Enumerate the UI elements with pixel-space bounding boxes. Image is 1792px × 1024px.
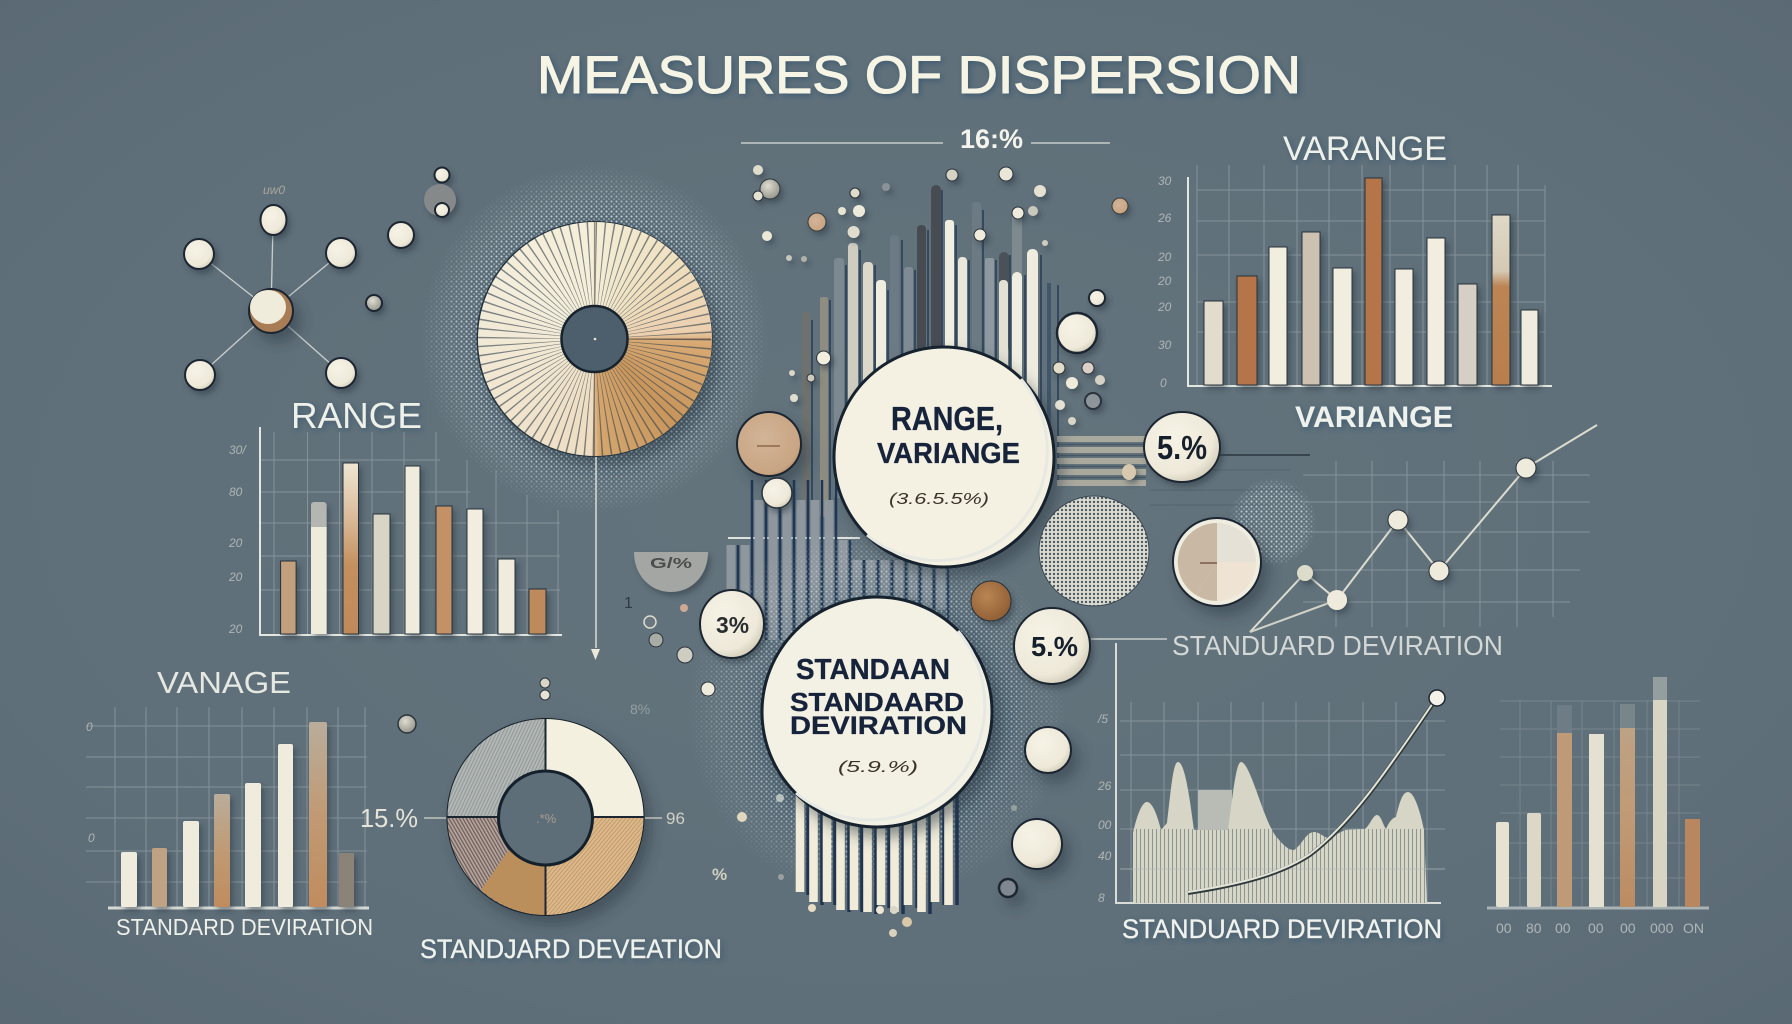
percentage bubble: 5.% upper: [1144, 412, 1220, 482]
sunburst center hole: [562, 306, 628, 372]
line chart: [1250, 425, 1597, 632]
bar chart: lower right: 00: [1620, 920, 1636, 936]
network diagram: uw0: [263, 183, 285, 197]
bar chart: range: 20: [228, 622, 243, 636]
bar chart: variance: 30: [1158, 174, 1172, 188]
main circle: range, variance: RANGE,: [891, 400, 1003, 437]
small pebbles lower center: 8%: [630, 701, 650, 717]
bar chart: variance: [1157, 165, 1552, 390]
cream balls right of lower circle: [999, 727, 1071, 897]
bars: [281, 463, 546, 634]
bar chart: lower right: ON: [1683, 920, 1704, 936]
bar chart: variance: 20: [1157, 250, 1172, 264]
bar chart: range: [228, 427, 562, 636]
bar chart: variance: 30: [1158, 338, 1172, 352]
label: standard deviation donut: STANDJARD DEVEATION: [420, 934, 722, 964]
donut chart: .*%: [536, 811, 557, 826]
area chart: 00: [1098, 818, 1112, 832]
trend curve: [1188, 698, 1437, 893]
sunburst chart: [476, 221, 712, 457]
main circle: standard deviation: STANDAARD: [790, 687, 964, 717]
percentage bubble: 3%: [700, 590, 764, 658]
outer nodes: [184, 205, 356, 390]
title: MEASURES OF DISPERSION: [537, 46, 1301, 105]
bar chart: variance: 0: [1160, 376, 1167, 390]
label: variance: VARIANGE: [1295, 401, 1453, 434]
bar chart: lower right: 00: [1588, 920, 1604, 936]
small cream disc: [762, 478, 792, 508]
percentage bubble: 5.% lower with leader: 5.%: [1031, 631, 1078, 662]
scattered pebbles left: [366, 168, 456, 311]
horizontal stripes right of main circle: [1057, 439, 1310, 505]
donut callouts: 96: [666, 809, 685, 828]
main circle: standard deviation: [762, 597, 992, 827]
small pie: [1173, 518, 1261, 606]
bar chart: lower right: 000: [1650, 920, 1674, 936]
dotted halo around standard deviation circle: [687, 522, 1067, 902]
main circle: standard deviation: (5.9.%): [838, 759, 918, 776]
bar chart: range: 80: [229, 485, 243, 499]
main circle: range, variance: [834, 347, 1054, 567]
bar chart: range: 30/: [229, 443, 247, 457]
pebbles around main circle: [789, 290, 1136, 480]
bar chart: lower left: 0: [88, 831, 95, 845]
area fill: [1130, 755, 1430, 904]
label: standard deviation area: STANDUARD DEVIRATION: [1122, 914, 1442, 944]
bar chart: variance: 20: [1157, 300, 1172, 314]
percentage bubble: 5.% lower with leader: [1014, 608, 1167, 684]
area chart: 26: [1097, 779, 1112, 793]
bar chart: lower right: 80: [1526, 920, 1542, 936]
center stripes: lower: [728, 480, 948, 640]
bars: [121, 722, 354, 907]
area chart: /5: [1097, 712, 1108, 726]
bar chart: variance: 26: [1157, 211, 1172, 225]
donut callouts: [360, 803, 685, 833]
center stripes: upper: [802, 185, 1058, 522]
bar chart: lower left: 0: [86, 720, 93, 734]
sunburst conic fill: [478, 222, 712, 456]
area chart: [1097, 643, 1445, 905]
label: standard deviation right: STANDUARD DEVIRATION: [1172, 630, 1503, 661]
label: range: RANGE: [291, 395, 422, 436]
navy glow behind standard deviation circle: [720, 557, 1050, 887]
axis labels: 00: [1496, 920, 1512, 936]
top percentage callout: 16:%: [960, 124, 1023, 154]
percentage bubble: 3%: 3%: [716, 612, 749, 638]
bar chart: range: 20: [228, 536, 243, 550]
bar chart: variance: 20: [1157, 274, 1172, 288]
donut callouts: 15.%: [360, 803, 418, 833]
bars: [1496, 822, 1509, 907]
bar chart: lower right: 00: [1555, 920, 1571, 936]
label: standard deviation left: STANDARD DEVIRATION: [116, 914, 373, 940]
main circle: range, variance: (3.6.5.5%): [889, 491, 989, 508]
donut hole: [498, 771, 592, 865]
label: vanage: VANAGE: [157, 665, 291, 700]
half disc badge: [634, 552, 708, 592]
area chart: 40: [1098, 849, 1112, 863]
line chart points: [1297, 458, 1536, 610]
half disc badge: G/%: [650, 555, 692, 572]
brown sphere: [971, 581, 1011, 621]
bars: [1204, 178, 1538, 385]
main circle: standard deviation: DEVIRATION: [790, 712, 967, 740]
stripe bars: [802, 312, 810, 522]
small pebbles lower center: 1: [624, 595, 633, 612]
bar chart: lower right: [1487, 677, 1709, 936]
bar chart: lower left: [86, 707, 369, 908]
area chart: 8: [1098, 891, 1105, 905]
hub node: [249, 289, 293, 333]
pebbles above central stripes: [753, 165, 1128, 262]
percentage bubble: 5.% upper: 5.%: [1157, 429, 1207, 466]
small pebbles lower center: [398, 595, 1017, 937]
label: varange: VARANGE: [1283, 130, 1447, 168]
main circle: range, variance: VARIANGE: [877, 438, 1020, 470]
donut chart: [446, 718, 644, 916]
pointer line with arrow tip: [591, 457, 600, 660]
main circle: standard deviation: STANDAAN: [796, 654, 950, 686]
dotted patch behind small pie: [1229, 478, 1317, 566]
tan disc: [737, 412, 801, 476]
navy glow behind sunburst: [450, 195, 750, 495]
bar chart: range: 20: [228, 570, 243, 584]
halftone sphere: [1039, 496, 1149, 606]
small pebbles lower center: %: [712, 865, 727, 884]
network diagram: [184, 183, 356, 390]
stripes below standard deviation circle: [800, 760, 957, 914]
dotted halo around sunburst: [420, 165, 768, 513]
